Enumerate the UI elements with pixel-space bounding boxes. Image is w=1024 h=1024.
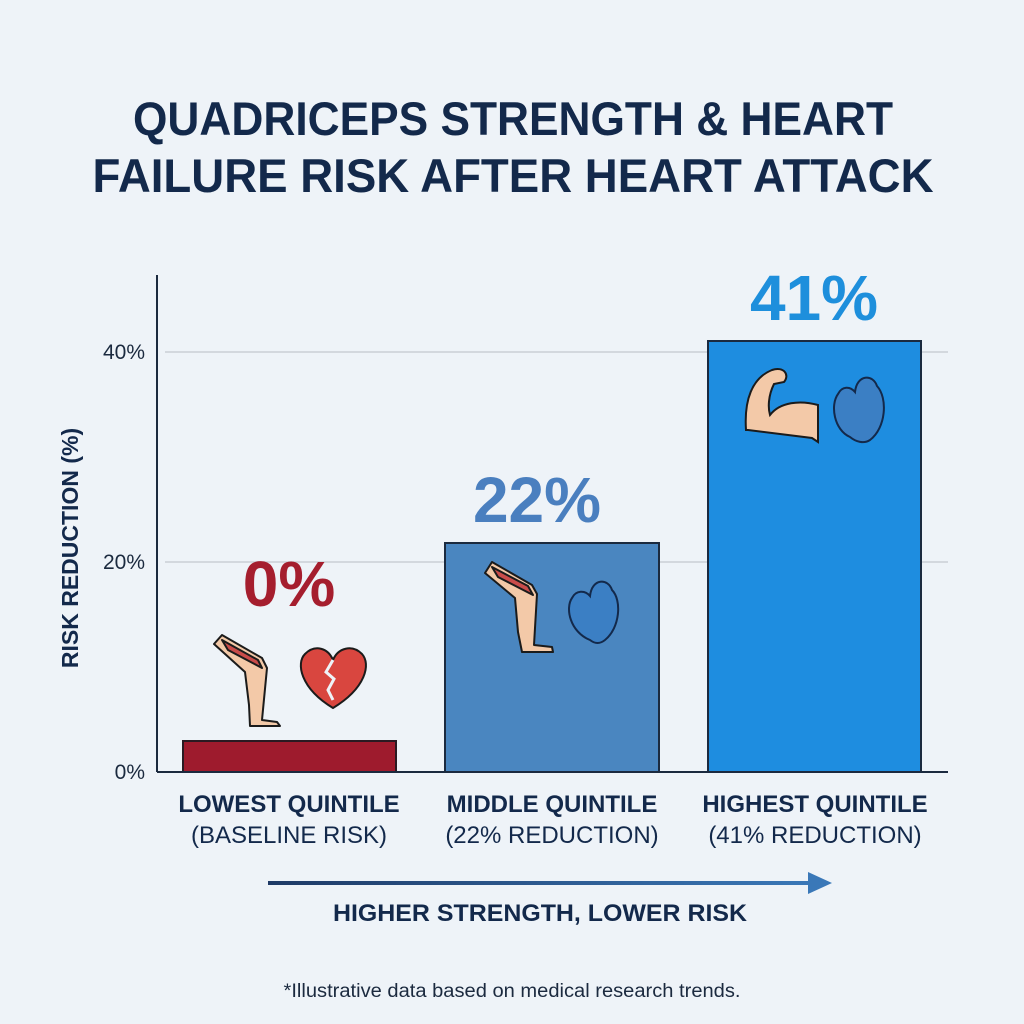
category labels: MIDDLE QUINTILE [447,791,657,818]
arrow caption: HIGHER STRENGTH, LOWER RISK [333,900,748,927]
icon: broken heart [301,648,366,708]
icon: weak leg [214,635,280,726]
value: 0%: 0% [243,548,335,620]
y axis [103,275,157,784]
value: 22%: 22% [473,464,601,536]
y axis: 0% [115,761,145,784]
arrow [268,872,832,894]
category labels: (41% REDUCTION) [708,822,922,849]
icon: heart [569,582,618,643]
bar: highest quintile [708,262,921,772]
category labels: (BASELINE RISK) [191,822,387,849]
title [92,92,934,202]
y axis title: RISK REDUCTION (%) [57,428,83,668]
footnote: *Illustrative data based on medical research trends. [284,981,740,1002]
x axis baseline [157,771,948,773]
value: 41%: 41% [750,262,878,334]
y axis: 40% [103,341,145,364]
y axis: 20% [103,551,145,574]
icon: flexed arm [746,369,818,442]
icon: strong heart [834,378,884,442]
category labels: HIGHEST QUINTILE [702,791,928,818]
title: QUADRICEPS STRENGTH & HEART [133,92,893,145]
category labels [178,791,928,849]
category labels: LOWEST QUINTILE [178,791,400,818]
title: FAILURE RISK AFTER HEART ATTACK [92,149,934,202]
bar: lowest quintile [183,548,396,772]
category labels: (22% REDUCTION) [445,822,659,849]
bar: middle quintile [445,464,659,772]
icon: leg [485,562,553,652]
